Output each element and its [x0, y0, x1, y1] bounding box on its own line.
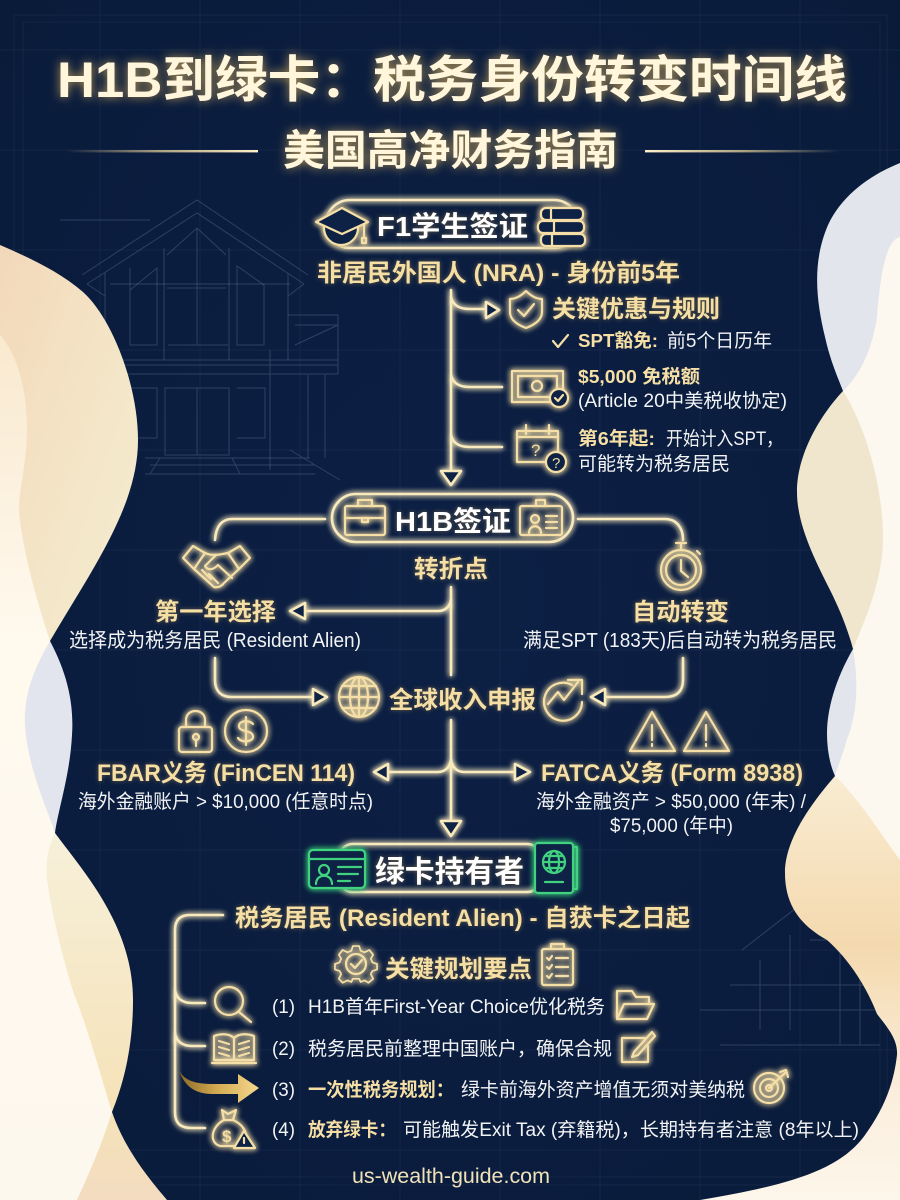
block: FATCA: FATCA义务 (Form 8938) [541, 760, 803, 787]
stage: H1B pill [332, 494, 573, 542]
icon: calendar: ? [552, 455, 560, 472]
arrow: golden highlight [179, 1070, 259, 1103]
icon: handshake [183, 546, 250, 587]
arrows: FBAR FATCA [374, 720, 530, 836]
item 2: 税务居民前整理中国账户，确保合规 [308, 1038, 612, 1060]
rule: SPT exemption [553, 330, 772, 352]
turning point label: 转折点 [414, 556, 488, 583]
block: FATCA: $75,000 (年中) [610, 815, 733, 837]
block: FATCA [536, 760, 807, 837]
item 1: H1B首年First-Year Choice优化税务 [308, 996, 605, 1018]
rule: year 6: 可能转为税务居民 [578, 453, 730, 475]
item 4 [213, 1110, 859, 1148]
item 4: (4) [272, 1120, 295, 1141]
icon: shield [510, 291, 542, 328]
blueprint house left [60, 200, 340, 480]
icon: passport [535, 843, 577, 893]
resident alien heading: 税务居民 (Resident Alien) - 自获卡之日起 [235, 904, 690, 932]
heading: F1: F1学生签证 [377, 211, 528, 242]
icon: books [538, 208, 585, 246]
icon: money [512, 371, 568, 407]
icon: target [754, 1070, 788, 1103]
arrows: turning point flow [215, 587, 683, 705]
icon: folder [617, 991, 654, 1019]
stage: green card pill [309, 843, 577, 893]
item 1 [215, 987, 654, 1022]
option: first-year choice [69, 599, 361, 652]
item 2: (2) [272, 1039, 295, 1060]
connectors from H1B [215, 519, 683, 540]
item 1: (1) [272, 997, 295, 1018]
item 3: 一次性税务规划： [308, 1079, 454, 1101]
item 4: 放弃绿卡： [308, 1118, 396, 1141]
item 3 [272, 1070, 788, 1103]
rule: $5,000 [578, 366, 787, 412]
blueprint house right [700, 890, 885, 1045]
icon: clipboard [542, 944, 573, 985]
subheading: NRA: 非居民外国人 (NRA) - 身份前5年 [317, 260, 680, 287]
icon: money bag [213, 1110, 255, 1148]
rule: year 6: 第6年起: [578, 428, 655, 449]
icon: lock [179, 711, 212, 752]
icon: pencil note [622, 1032, 655, 1062]
icon: globe [339, 677, 379, 717]
icon: growth [544, 680, 582, 721]
rules heading: 关键优惠与规则 [552, 296, 720, 323]
rule: $5,000: $5,000 免税额 [578, 366, 701, 387]
icon: magnifier [215, 987, 251, 1022]
footer url: us-wealth-guide.com [352, 1165, 550, 1188]
block: FBAR: FBAR义务 (FinCEN 114) [97, 760, 355, 787]
option: automatic change: 自动转变 [632, 598, 729, 626]
icon: dollar [225, 710, 267, 752]
item 2 [212, 1032, 655, 1063]
item 3: (3) [272, 1080, 295, 1101]
title: H1B到绿卡：税务身份转变时间线 [57, 52, 847, 108]
heading: global income: 全球收入申报 [389, 687, 536, 714]
item 4: 可能触发Exit Tax (弃籍税)，长期持有者注意 (8年以上) [403, 1119, 859, 1141]
option: automatic change [523, 598, 837, 652]
icon: money bag: $ [222, 1127, 232, 1146]
rule: year 6: 开始计入SPT， [666, 428, 783, 450]
icon: open book [212, 1034, 256, 1063]
rule: SPT exemption: SPT豁免: [578, 330, 658, 351]
subtitle: 美国高净财务指南 [283, 127, 618, 174]
decorative wave: right [700, 163, 900, 1200]
rule: $5,000: (Article 20中美税收协定) [578, 390, 787, 412]
rule: SPT exemption: 前5个日历年 [667, 330, 772, 352]
block: FBAR [78, 760, 373, 813]
icon: warnings [630, 712, 729, 751]
item 3: 绿卡前海外资产增值无须对美纳税 [461, 1079, 745, 1101]
icon: green card [309, 850, 365, 888]
heading: green card holder: 绿卡持有者 [375, 856, 524, 889]
option: first-year choice: 第一年选择 [155, 599, 276, 626]
option: automatic change: 满足SPT (183天)后自动转为税务居民 [523, 629, 837, 652]
bracket connector [175, 915, 223, 1128]
heading: H1B: H1B签证 [395, 506, 511, 537]
rule: year 6 [578, 428, 783, 475]
icon: calendar [517, 425, 566, 472]
icon: id badge [520, 500, 562, 535]
block: FBAR: 海外金融账户 > $10,000 (任意时点) [78, 791, 373, 813]
icon: gear [335, 946, 377, 983]
block: FATCA: 海外金融资产 > $50,000 (年末) / [536, 791, 807, 813]
option: first-year choice: 选择成为税务居民 (Resident Alien) [69, 629, 361, 652]
heading: planning points: 关键规划要点 [385, 956, 532, 983]
icon: calendar: ? [531, 441, 540, 460]
icon: stopwatch [661, 543, 701, 590]
icon: graduation cap [316, 208, 368, 245]
stage: F1 student visa pill [316, 200, 585, 248]
flow: F1 branches [441, 290, 502, 485]
icon: briefcase [345, 500, 385, 535]
decorative wave: left [0, 245, 167, 1200]
